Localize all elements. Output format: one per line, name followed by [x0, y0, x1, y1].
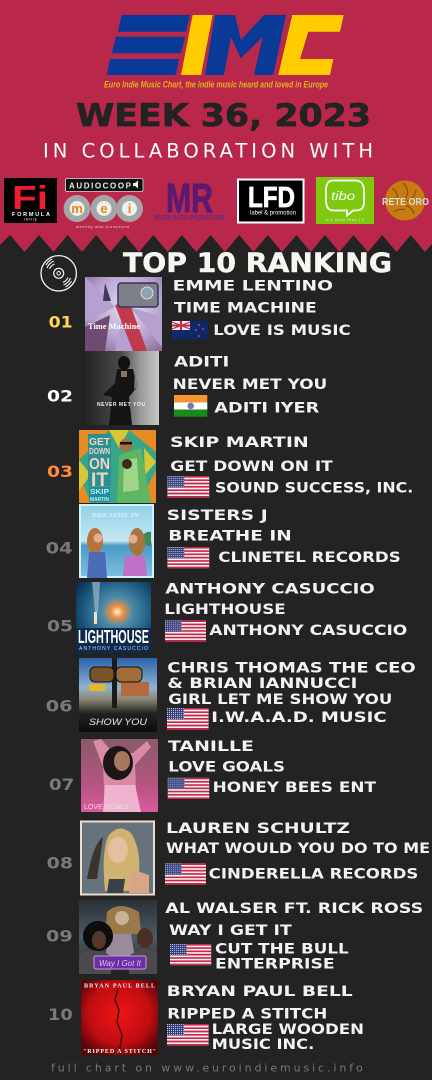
entry 05: [47, 582, 407, 653]
title: WHAT WOULD YOU DO TO ME: [166, 841, 430, 857]
cover: Breathe In: BREATHE IN: [92, 512, 139, 519]
rank 05: 05: [47, 617, 73, 636]
artist: BRYAN PAUL BELL: [167, 984, 353, 1000]
flag: New Zealand: [172, 321, 208, 339]
cover: Get Down On It: SKIP: [90, 489, 109, 496]
partner logo: Formula Indie: INDIE: [24, 218, 38, 222]
label line 1: LARGE WOODEN: [212, 1022, 364, 1038]
cover: Love Goals: [81, 739, 158, 812]
flag: USA: [165, 863, 206, 885]
partner logo: Formula Indie: FORMULA: [12, 212, 50, 218]
heading: top 10 ranking: TOP 10 RANKING: [123, 248, 392, 279]
cover: Get Down On It: [79, 430, 156, 503]
partner logo: mei: e: [100, 201, 108, 216]
label line 2: ENTERPRISE: [215, 957, 335, 973]
cover: Never Met You: NEVER MET YOU: [97, 402, 145, 408]
partner logo: mei: meeting deal promotions: [76, 225, 129, 229]
partner logo: LFD: LFD: [248, 182, 295, 214]
cover: Get Down On It: GET: [89, 437, 110, 448]
title: LOVE GOALS: [168, 760, 285, 776]
partner logo: Rete Oro: [382, 180, 429, 220]
label line 2: MUSIC INC.: [212, 1037, 314, 1053]
flag: USA: [165, 620, 206, 642]
header background: [0, 0, 432, 254]
cover: Get Down On It: DOWN: [89, 447, 110, 456]
cover: Lighthouse: LIGHTHOUSE: [78, 627, 149, 647]
flag: USA: [168, 778, 209, 799]
rank 02: 02: [47, 387, 73, 406]
entry 08: [47, 819, 430, 897]
partner logo: LFD: label & promotion: [250, 210, 296, 216]
entry 03: [47, 430, 413, 503]
partner logo: Musik Radio Promotions: MR: [166, 175, 213, 221]
cover: Lighthouse: [76, 582, 151, 653]
flag: USA: [167, 708, 209, 730]
label line 1: CUT THE BULL: [215, 942, 349, 958]
cover: Way I Get It: [79, 900, 157, 974]
artist: LAUREN SCHULTZ: [166, 821, 350, 837]
entry 07: [49, 739, 377, 812]
rank 08: 08: [47, 853, 73, 872]
artist: ANTHONY CASUCCIO: [165, 582, 375, 598]
artist: AL WALSER FT. RICK ROSS: [165, 901, 423, 917]
cover: Breathe In: [79, 504, 154, 578]
rank 03: 03: [47, 462, 73, 481]
cover: Get Down On It: ON: [89, 456, 110, 473]
logo tagline: Euro Indie Music Chart, the indie music heard and loved in Europe: [104, 80, 329, 90]
artist: ADITI: [174, 355, 229, 371]
title: RIPPED A STITCH: [167, 1006, 327, 1022]
partner logo: Formula Indie: Fi: [12, 179, 48, 216]
partner logo: mei: [64, 195, 143, 229]
cover: What Would You Do To Me: [79, 819, 156, 897]
cover: Ripped A Stitch: BRYAN PAUL BELL: [84, 984, 155, 990]
entry 10: [48, 980, 364, 1055]
cover: Get Down On It: MARTIN: [90, 497, 109, 503]
cover: Time Machine: [85, 277, 162, 351]
entry 02: [47, 351, 327, 425]
rank 10: 10: [48, 1005, 73, 1024]
rank 06: 06: [46, 697, 73, 716]
title: BREATHE IN: [168, 529, 292, 545]
partner logo: Formula Indie: [4, 178, 57, 223]
artist line 2: & BRIAN IANNUCCI: [167, 676, 357, 692]
partner logo: tibo: [316, 177, 374, 224]
cover: Never Met You: [83, 351, 159, 425]
flag: USA: [170, 944, 211, 965]
title: WAY I GET IT: [169, 923, 292, 939]
heading: week: WEEK 36, 2023: [76, 98, 371, 134]
title: LIGHTHOUSE: [164, 602, 286, 618]
partner logo: tibo: tibo: [331, 191, 356, 203]
rank 07: 07: [49, 775, 74, 794]
title: GET DOWN ON IT: [170, 459, 333, 475]
rank 01: 01: [49, 313, 73, 332]
label: ADITI IYER: [214, 400, 320, 416]
label: I.W.A.A.D. MUSIC: [211, 710, 387, 726]
cover: Lighthouse: ANTHONY CASUCCIO: [79, 646, 148, 652]
rank 04: 04: [46, 538, 73, 557]
rank 09: 09: [46, 927, 73, 946]
title: GIRL LET ME SHOW YOU: [168, 692, 392, 708]
label: CLINETEL RECORDS: [218, 550, 401, 566]
entry 09: [46, 900, 423, 974]
flag: USA: [167, 476, 209, 498]
partner logo: Musik Radio Promotions: MUSIK RADIO PROMOTIONS: [155, 214, 226, 222]
artist line 1: CHRIS THOMAS THE CEO: [167, 661, 416, 677]
partner logo: mei: m: [71, 201, 83, 216]
flag: USA: [167, 1024, 209, 1046]
logo: EIMC: [107, 15, 344, 75]
cover: Time Machine: Time Machine: [88, 322, 140, 331]
partner logo: Audiocoop: AUDIOCOOP: [69, 182, 132, 190]
label: HONEY BEES ENT: [213, 780, 377, 796]
label: ANTHONY CASUCCIO: [209, 623, 407, 639]
cover: Way I Get It: Way I Got It: [99, 959, 142, 968]
cover: Love Goals: LOVE GOALS: [84, 804, 129, 811]
partner logo: LFD: [237, 178, 304, 224]
title: NEVER MET YOU: [173, 377, 327, 393]
cover: Girl Let Me Show You: SHOW YOU: [89, 717, 148, 727]
partner logo: tibo: it's more than TV: [326, 218, 365, 222]
artist: EMME LENTINO: [173, 279, 333, 295]
cover: Ripped A Stitch: "RIPPED A STITCH": [83, 1049, 156, 1055]
flag: India: [174, 395, 207, 417]
artist: TANILLE: [168, 739, 254, 755]
label: LOVE IS MUSIC: [213, 323, 351, 339]
cover: Ripped A Stitch: [81, 980, 158, 1055]
title: TIME MACHINE: [174, 301, 317, 317]
partner logo: Audiocoop: [66, 178, 143, 192]
artist: SISTERS J: [167, 508, 268, 524]
footer text: full chart on www.euroindiemusic.info: [51, 1062, 363, 1075]
cover: Get Down On It: IT: [91, 470, 108, 491]
label: SOUND SUCCESS, INC.: [215, 480, 413, 496]
artist: SKIP MARTIN: [170, 435, 309, 451]
label: CINDERELLA RECORDS: [209, 867, 418, 883]
partner logo: mei: i: [128, 201, 131, 216]
body background with zigzag edge: [0, 235, 432, 1080]
icon: vinyl disc: [41, 256, 76, 291]
entry 01: [49, 277, 351, 351]
flag: USA: [167, 547, 209, 568]
entry 04: [46, 504, 401, 578]
entry 06: [46, 658, 416, 732]
heading: collaboration: IN COLLABORATION WITH: [43, 140, 373, 162]
cover: Girl Let Me Show You: [79, 658, 157, 732]
